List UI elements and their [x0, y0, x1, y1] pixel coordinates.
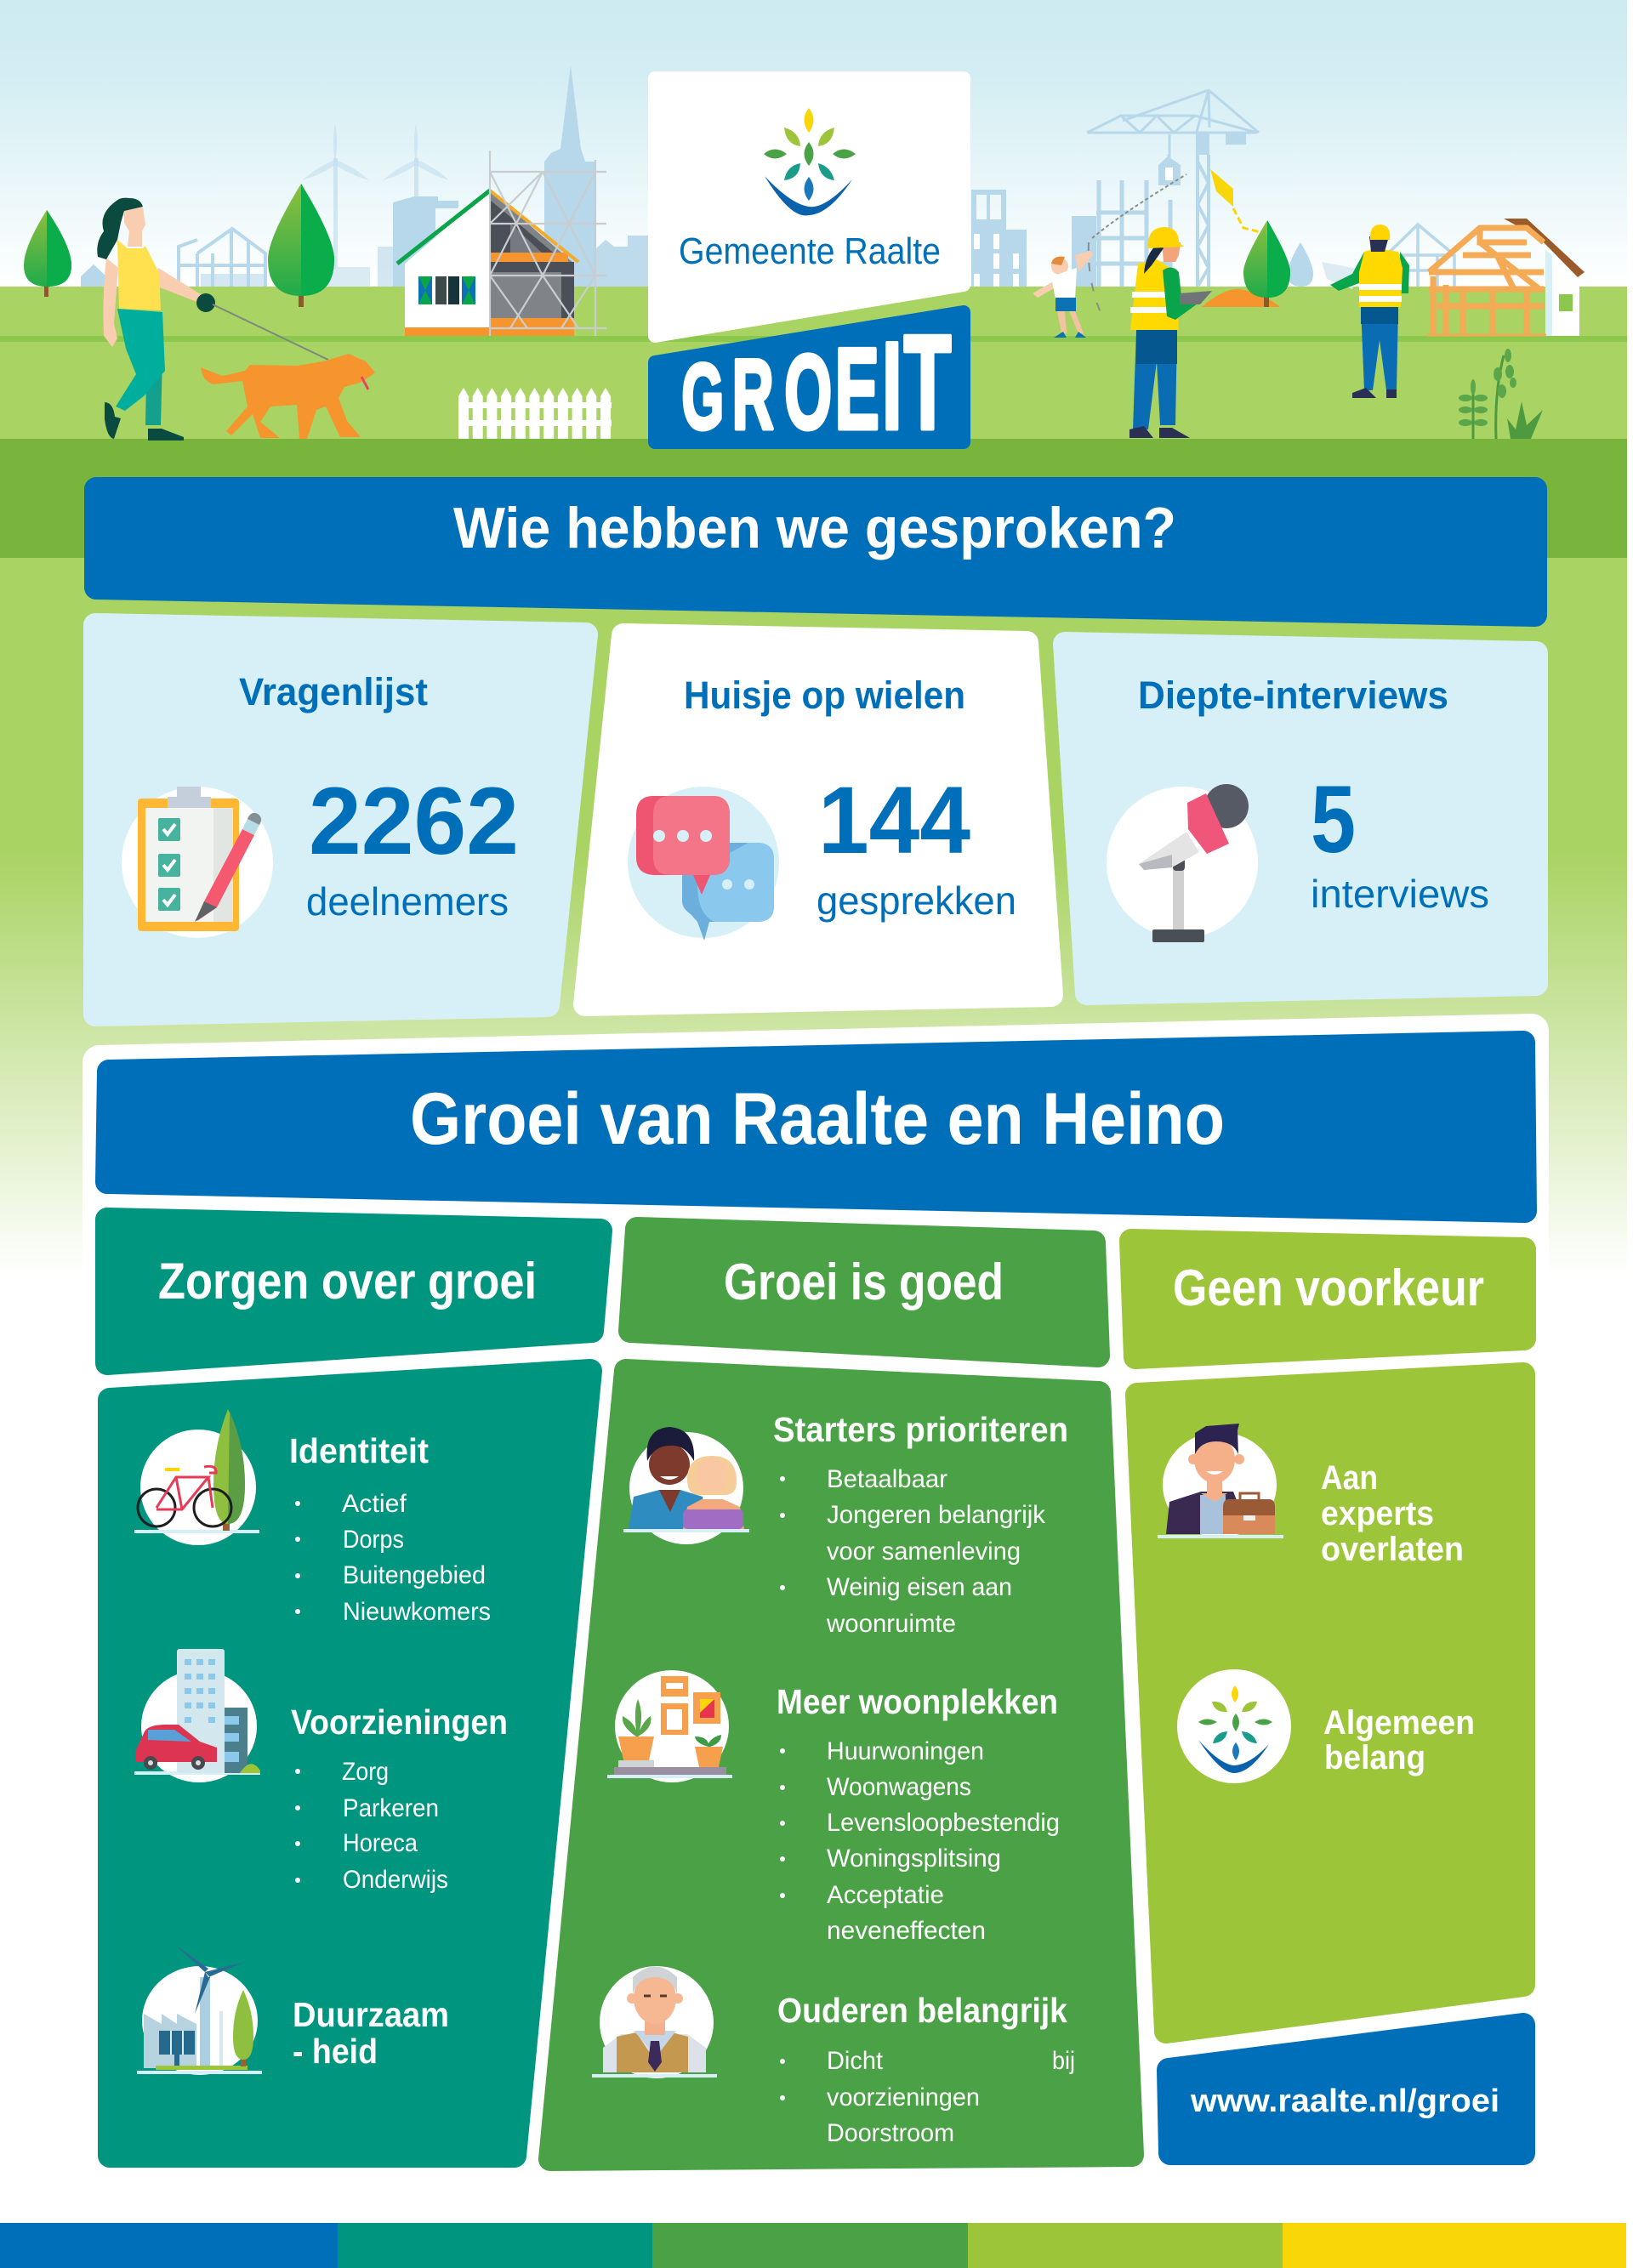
GROEIT badge: E [834, 323, 879, 453]
header: Zorgen over groei [107, 1219, 600, 1363]
logo wordmark: Gemeente Raalte [679, 230, 941, 272]
text: Starters prioriteren: Jongeren belangrijk [827, 1501, 1046, 1529]
text: Algemeen belang [1323, 1704, 1475, 1776]
banner: Groei van Raalte en Heino [107, 1043, 1525, 1211]
icon: factory and wind turbine [137, 1945, 262, 2075]
GROEIT badge: G [682, 345, 724, 449]
GROEIT badge: R [732, 339, 774, 451]
text: Meer woonplekken: Meer woonplekken [777, 1682, 1058, 1721]
text: Identiteit [289, 1431, 491, 1626]
banner: Groei van Raalte en Heino: Groei van Raalte en Heino [410, 1078, 1225, 1160]
text: Aan experts overlaten: Aan [1321, 1459, 1378, 1497]
icon: municipal emblem [1177, 1669, 1291, 1783]
icon: logo leaves [764, 108, 856, 215]
plants foreground [1459, 349, 1543, 439]
text: Algemeen belang: Algemeen [1323, 1704, 1475, 1742]
text: Duurzaamheid: Duurzaam [293, 1995, 449, 2034]
text: Starters prioriteren: woonruimte [826, 1610, 956, 1638]
text: Meer woonplekken: Acceptatie [827, 1881, 944, 1909]
icon: speech bubbles [628, 787, 779, 941]
number 144: 144 [818, 767, 970, 873]
tree center-left [268, 184, 334, 307]
GROEIT badge: I [882, 317, 902, 456]
icon: clipboard with pencil [122, 787, 273, 938]
text: Starters prioriteren [773, 1410, 1068, 1638]
text: Voorzieningen: Horeca [343, 1829, 418, 1857]
header: Zorgen over groei: Zorgen over groei [158, 1253, 537, 1310]
icon: plants and wall frames [607, 1670, 732, 1782]
background: sky, meadow and fade [0, 0, 1627, 1276]
heading: Vragenlijst: Vragenlijst [239, 670, 428, 713]
logo card: Gemeente Raalte [655, 78, 964, 336]
text: Meer woonplekken: Woningsplitsing [827, 1845, 1001, 1873]
label interviews: interviews [1311, 872, 1489, 916]
banner: Wie hebben we gesproken [96, 489, 1535, 615]
callout: website [1169, 2025, 1523, 2153]
tree and sand mound [1202, 220, 1290, 307]
text: Ouderen belangrijk: Doorstroom [827, 2119, 954, 2147]
icon: bicycle and tree [134, 1409, 259, 1545]
label deelnemers: deelnemers [306, 879, 509, 924]
text: Voorzieningen: Zorg [342, 1758, 389, 1786]
header: Geen voorkeur [1131, 1241, 1524, 1357]
text: Starters prioriteren: Starters prioriteren [773, 1410, 1068, 1449]
icon: microphone [1107, 784, 1258, 942]
panel: white backdrop for Groei van Raalte en Heino [100, 1031, 1532, 1395]
text: Aan experts overlaten: experts [1321, 1495, 1434, 1532]
panel: Vragenlijst [95, 625, 586, 1015]
icon: older man [592, 1966, 717, 2078]
text: Aan experts overlaten: overlaten [1321, 1531, 1464, 1568]
panel: lime column no preference [1137, 1374, 1523, 2032]
text: Identiteit: Nieuwkomers [343, 1598, 491, 1626]
text: Voorzieningen [291, 1702, 508, 1894]
tree left [24, 210, 71, 297]
panel: Huisje op wielen [585, 635, 1051, 1004]
number 2262: 2262 [309, 768, 519, 874]
text: Ouderen belangrijk [777, 1991, 1075, 2147]
GROEIT badge: O [784, 334, 832, 452]
child with kite [1033, 169, 1267, 338]
timber frame house [1427, 219, 1585, 336]
text: Voorzieningen: Voorzieningen [291, 1702, 508, 1742]
text: Identiteit: Dorps [343, 1526, 404, 1554]
woman walking the dog [97, 198, 375, 441]
text: Duurzaamheid: - heid [293, 2032, 378, 2071]
text: Meer woonplekken: Huurwoningen [827, 1737, 984, 1765]
icon: two young people [623, 1427, 749, 1544]
construction worker with tablet [1129, 227, 1212, 438]
skyline left: pale buildings, turbines and church [81, 65, 648, 287]
panel: teal column concerns [110, 1371, 590, 2156]
text: Meer woonplekken: Woonwagens [827, 1773, 971, 1801]
panel: green column growth is good [550, 1371, 1132, 2159]
header: Geen voorkeur: Geen voorkeur [1173, 1259, 1484, 1316]
text: Ouderen belangrijk: Dicht [827, 2047, 884, 2075]
callout: website: www.raalte.nl/groei [1190, 2083, 1499, 2119]
heading: Huisje op wielen: Huisje op wielen [684, 674, 965, 717]
number 5: 5 [1311, 766, 1356, 873]
text: Meer woonplekken: Levensloopbestendig [827, 1809, 1060, 1837]
text: Starters prioriteren: Betaalbaar [827, 1465, 947, 1493]
panel: Diepte-interviews [1065, 644, 1536, 993]
text: Meer woonplekken [777, 1682, 1060, 1945]
text: Ouderen belangrijk: Ouderen belangrijk [777, 1991, 1067, 2030]
text: Aan experts overlaten [1321, 1459, 1464, 1568]
header: Groei is goed [630, 1229, 1098, 1356]
icon: expert with briefcase [1158, 1424, 1283, 1538]
text: Meer woonplekken: neveneffecten [827, 1917, 986, 1945]
GROEIT badge: T [904, 308, 952, 458]
skyline right: buildings, crane and frame [971, 90, 1454, 287]
text: Starters prioriteren: Weinig eisen aan [827, 1573, 1012, 1601]
label gesprekken: gesprekken [816, 878, 1016, 923]
GROEIT badge [655, 308, 964, 458]
text: Duurzaamheid [293, 1995, 449, 2071]
heading: Diepte-interviews: Diepte-interviews [1138, 674, 1448, 717]
icon: building and car [134, 1649, 260, 1782]
footer colour strip [0, 2223, 1626, 2268]
text: Voorzieningen: Parkeren [343, 1794, 439, 1822]
text: Identiteit: Buitengebied [343, 1561, 486, 1589]
picket fence [458, 388, 612, 439]
text: Ouderen belangrijk: bij [1052, 2047, 1075, 2075]
text: Starters prioriteren: voor samenleving [827, 1538, 1021, 1566]
header: Groei is goed: Groei is goed [724, 1253, 1004, 1310]
banner: Wie hebben we gesproken: Wie hebben we gesproken? [453, 496, 1176, 560]
house under construction with scaffold [397, 151, 606, 336]
text: Identiteit: Actief [342, 1490, 407, 1518]
construction worker with blueprint [1322, 225, 1409, 398]
text: Ouderen belangrijk: voorzieningen [827, 2083, 980, 2112]
text: Voorzieningen: Onderwijs [343, 1866, 448, 1894]
text: Identiteit: Identiteit [289, 1431, 429, 1470]
text: Algemeen belang: belang [1324, 1739, 1425, 1776]
